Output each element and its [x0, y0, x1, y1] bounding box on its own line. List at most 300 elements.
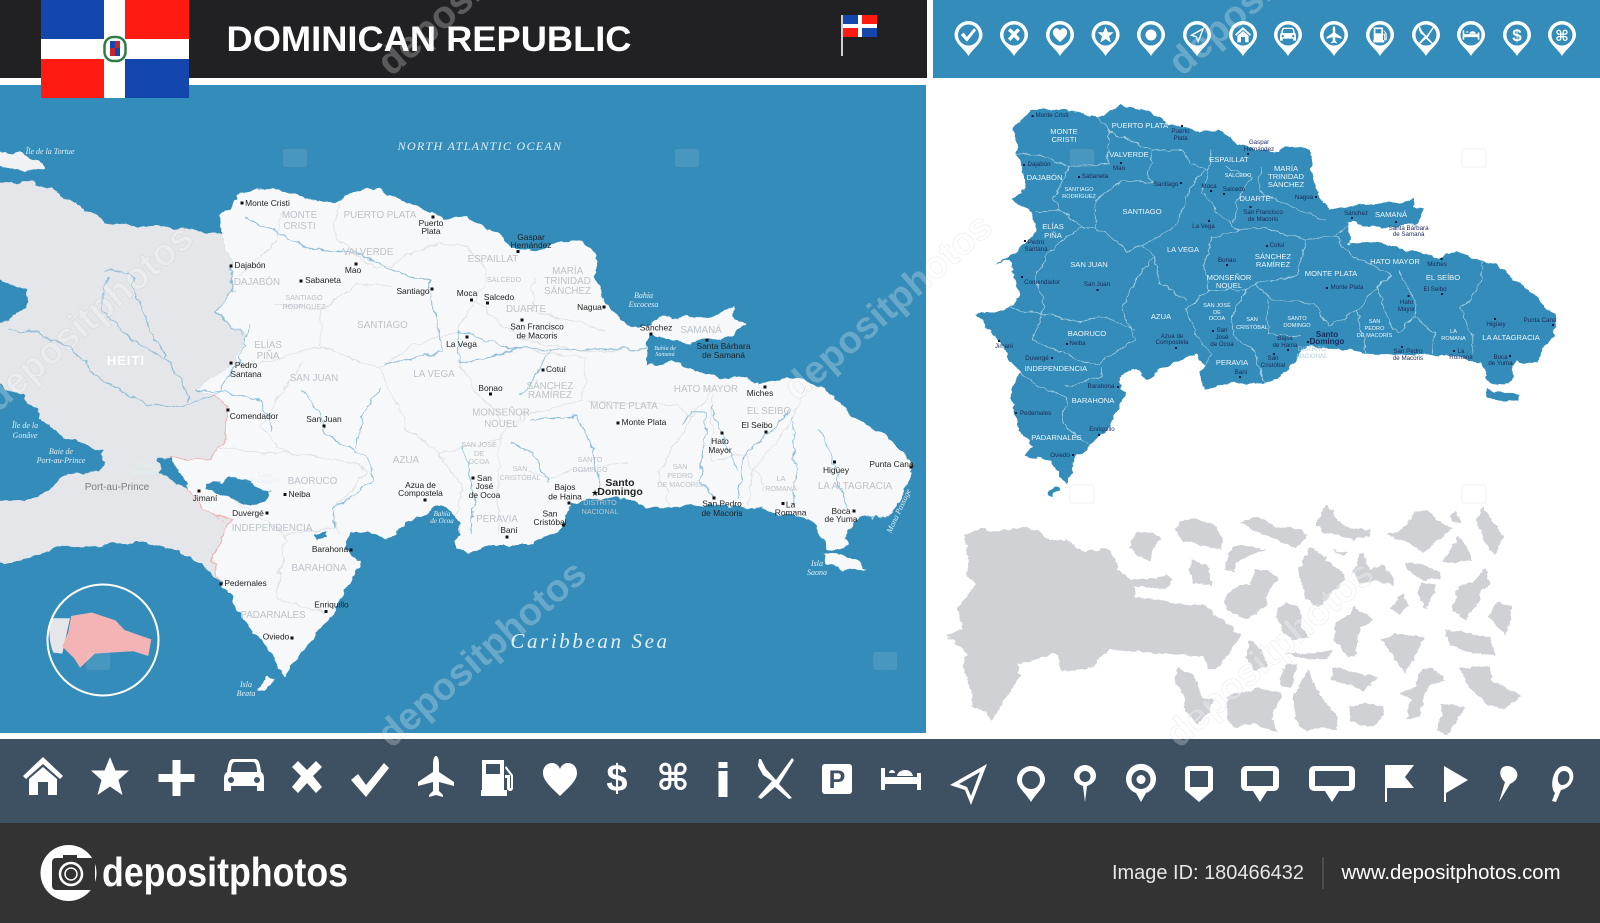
city labels: Bajos [1277, 335, 1293, 342]
city labels: de Samaná [702, 350, 745, 360]
international border [168, 394, 230, 583]
city labels: Nagua [577, 302, 602, 312]
province labels: SAMANÁ [1375, 210, 1408, 219]
province labels: SALCEDO [1225, 173, 1252, 179]
water labels: Port-au-Prince [36, 456, 86, 465]
province labels [1025, 121, 1541, 442]
city labels: José [1215, 334, 1229, 341]
city labels: San [477, 473, 492, 483]
city labels: de Macoris [517, 330, 557, 340]
province labels: MONTE PLATA [590, 401, 658, 412]
icon: pin dollar: $ [1512, 26, 1522, 45]
province labels: DAJABÓN [234, 277, 280, 288]
province labels: NACIONAL [582, 507, 618, 516]
province labels: MONSEÑOR [472, 408, 530, 418]
water labels: Enriquillo [250, 477, 280, 485]
city labels: Monte Cristi [1035, 112, 1069, 119]
province labels: SÁNCHEZ [544, 286, 591, 297]
water labels: Mona Passage [884, 487, 913, 535]
city labels: Compostela [1155, 339, 1189, 346]
icon: home [23, 757, 63, 795]
water labels: Saona [807, 568, 827, 577]
city labels: Cotuí [546, 364, 567, 374]
province labels: HATO MAYOR [674, 384, 738, 395]
icon: pin command: ⌘ [1555, 27, 1569, 45]
province borders [1009, 118, 1483, 445]
city labels: Comendador [230, 411, 278, 421]
city labels: de Ocoa [469, 490, 501, 500]
city labels: Sabaneta [1082, 173, 1109, 180]
province labels: OCOA [1209, 316, 1225, 322]
icon: pin dollar [1503, 21, 1531, 56]
city labels: Santana [230, 369, 262, 379]
city labels: Baní [1235, 369, 1248, 376]
icon: navigation [950, 764, 987, 805]
city labels: Oviedo [263, 632, 290, 642]
city labels: Romana [1449, 354, 1473, 361]
province labels: RODRÍGUEZ [1062, 193, 1096, 200]
icon: square callout [1185, 766, 1213, 802]
icon: star [91, 757, 129, 795]
icon: flag [1385, 765, 1414, 802]
city labels: Compostela [398, 488, 443, 498]
province labels: MONTE PLATA [1305, 269, 1358, 278]
icon: pin command [1548, 21, 1576, 56]
city labels: Salcedo [484, 292, 514, 302]
icon: plus [158, 760, 194, 796]
city labels: Punta Cana [869, 459, 914, 469]
province labels: SAN JOSÉ [461, 440, 497, 449]
icon: command: ⌘ [656, 758, 690, 799]
province labels: NOUEL [484, 419, 518, 430]
province labels: SAN JOSÉ [1203, 302, 1231, 309]
province labels: DOMINGO [1283, 323, 1311, 329]
icon: pin car [1274, 21, 1302, 56]
province labels: DE [1213, 310, 1221, 316]
city labels: Puerto [1171, 128, 1190, 135]
flag: small pin [841, 15, 877, 56]
city labels: Barahona [1088, 383, 1115, 390]
city labels: Comendador [1024, 279, 1060, 286]
city labels: Plata [421, 226, 441, 236]
province labels: DE [474, 449, 484, 458]
watermarks: depositphotos [775, 205, 1001, 409]
province labels: LA [1450, 329, 1457, 335]
city labels: Monte Plata [622, 417, 667, 427]
province labels: MARÍA [552, 266, 584, 277]
panel: main map [0, 85, 926, 733]
province labels: SALCEDO [487, 275, 522, 284]
city labels: Moca [457, 288, 478, 298]
province labels: SÁNCHEZ [1255, 252, 1291, 261]
logo: camera mark [40, 845, 96, 901]
province labels: CRISTÓBAL [500, 473, 540, 482]
icon: heart [543, 763, 577, 796]
panel: gray country and province silhouettes [946, 505, 1522, 735]
city labels: Plata [1173, 135, 1188, 142]
city labels: Miches [747, 388, 773, 398]
water labels: de Ocoa [430, 517, 454, 525]
water labels: Beata [237, 689, 255, 698]
city labels: Bonao [478, 383, 503, 393]
province labels: LA VEGA [413, 369, 455, 380]
province labels: PERAVIA [476, 514, 518, 525]
city labels: El Seibo [1423, 286, 1447, 293]
city labels: Sabaneta [305, 275, 341, 285]
city labels: Higüey [823, 465, 850, 475]
province labels: VALVERDE [343, 247, 394, 258]
province borders [219, 203, 807, 613]
city labels: Boca [831, 506, 851, 516]
city labels: Baní [500, 525, 518, 535]
city labels: Barahona [312, 544, 348, 554]
province labels: DE MACORÍS [1357, 332, 1392, 339]
city labels: Mayor [708, 445, 732, 455]
flag: large [41, 0, 189, 98]
city labels: Salcedo [1223, 186, 1246, 193]
city labels: Monte Cristi [245, 198, 290, 208]
city labels: Azua de [405, 480, 436, 490]
capital marker: Santo Domingo: ★ [591, 488, 599, 498]
city labels: San [543, 508, 558, 518]
province labels: SAN [673, 462, 687, 471]
city labels: Gaspar [517, 232, 545, 242]
city labels: San Francisco [1243, 209, 1283, 216]
province labels: SANTIAGO [1122, 207, 1162, 216]
province labels: RAMÍREZ [1256, 260, 1290, 269]
province labels: TRINIDAD [544, 276, 591, 287]
landmass [0, 151, 913, 691]
city labels: Oviedo [1050, 452, 1070, 459]
province labels: CRISTÓBAL [1236, 324, 1268, 331]
city labels: Santiago [396, 286, 430, 296]
city labels: de Macoris [1393, 355, 1423, 362]
province silhouettes [1130, 505, 1522, 735]
city labels: Bajos [555, 482, 575, 492]
province labels: SÁNCHEZ [527, 381, 573, 392]
city labels: La [1458, 348, 1465, 355]
icon: magnifier [1552, 766, 1573, 802]
city labels: de Yuma [1488, 360, 1513, 367]
website url: www.depositphotos.com [1340, 862, 1560, 884]
water labels: Samaná [655, 352, 675, 358]
icon: bed [881, 768, 921, 790]
water labels: Lago [257, 471, 273, 479]
logo: wordmark: depositphotos [102, 849, 348, 895]
city labels: Pedro [235, 360, 258, 370]
city labels: Domingo [597, 486, 643, 498]
city labels: de Ocoa [1210, 341, 1234, 348]
city labels: Bonao [1218, 257, 1236, 264]
city labels: Santa Bárbara [1389, 225, 1429, 232]
icon: map pin [1017, 766, 1045, 802]
province labels: SANTO [578, 455, 603, 464]
province labels: PADARNALES [240, 610, 306, 621]
province labels: DE MACORÍS [657, 480, 703, 489]
city labels [995, 112, 1557, 459]
city labels: Pedro [1028, 239, 1045, 246]
city labels: San Juan [1084, 281, 1111, 288]
city labels: Mao [345, 265, 361, 275]
province labels: ESPAILLAT [468, 254, 518, 265]
icon: pin cross [1000, 21, 1028, 56]
icon: pin bed [1457, 21, 1485, 56]
icon: cross [292, 761, 322, 793]
city labels: Punta Cana [1524, 317, 1557, 324]
city labels: DISTRITO [1298, 347, 1326, 353]
water labels: Bahía [634, 291, 653, 300]
icon: plane [418, 756, 454, 797]
province labels: MONSEÑOR [1207, 273, 1252, 282]
city labels: Hato [1400, 299, 1414, 306]
province labels: ESPAILLAT [1209, 155, 1249, 164]
province labels: ROMANA [765, 484, 797, 493]
province labels: ELÍAS [1042, 222, 1064, 231]
province labels: PIÑA [257, 351, 280, 362]
city labels: La [786, 500, 796, 510]
city labels: Enriquillo [1089, 426, 1115, 433]
province labels: PIÑA [1044, 231, 1063, 240]
panel: province map [977, 105, 1557, 497]
city labels: San [1216, 327, 1228, 334]
city labels: Santa Bárbara [696, 341, 751, 351]
water labels: Bahía de [654, 346, 676, 352]
label: Heiti: HEITI [107, 353, 145, 368]
province labels: CRISTI [283, 221, 316, 232]
province labels: NOUEL [1216, 281, 1242, 290]
city labels: San [1267, 355, 1279, 362]
province labels: CRISTI [1052, 135, 1076, 144]
city labels: Cristóbal [1261, 362, 1285, 369]
province labels: BARAHONA [292, 563, 347, 574]
icon: dollar: $ [606, 758, 628, 800]
province labels [232, 210, 893, 621]
province labels: AZUA [393, 455, 420, 466]
city labels: Duvergé [1025, 355, 1049, 362]
province labels: DOMINGO [572, 465, 608, 474]
province labels: PUERTO PLATA [344, 210, 417, 221]
province labels: BARAHONA [1072, 396, 1115, 405]
city markers [198, 202, 912, 640]
province labels: SANTIAGO [357, 320, 408, 331]
province labels: MARÍA [1274, 164, 1299, 173]
city labels: Azua de [1161, 333, 1184, 340]
city labels: Romana [775, 508, 807, 518]
province labels: SAN [1246, 317, 1258, 323]
city labels: de Haina [548, 492, 582, 502]
city labels: Mao [1113, 165, 1126, 172]
city labels: Sánchez [1344, 210, 1368, 217]
province labels: LA [777, 474, 786, 483]
province labels: EL SEIBO [747, 406, 792, 417]
title: DOMINICAN REPUBLIC [226, 20, 632, 59]
icon: pin check [954, 21, 982, 56]
province labels: DISTRITO [583, 498, 617, 507]
province labels: SAMANÁ [680, 325, 722, 336]
province labels: DUARTE [1239, 194, 1271, 203]
city labels: Hato [711, 436, 729, 446]
province labels: EL SEÍBO [1426, 273, 1460, 282]
province labels: BAORUCO [1068, 329, 1106, 338]
province labels: SAN [513, 464, 527, 473]
city labels: Cristóbal [533, 517, 567, 527]
province labels: SANTIAGO [1065, 187, 1094, 193]
city labels: Pedernales [1020, 410, 1051, 417]
watermarks: depositphotos [1157, 552, 1383, 756]
water labels: Baie de [49, 447, 74, 456]
city labels: Neiba [289, 489, 311, 499]
city labels: de Yuma [825, 514, 858, 524]
icon: restaurant [758, 758, 794, 799]
icon: check [351, 763, 389, 797]
icons row [23, 756, 1573, 805]
city labels: Duvergé [232, 508, 264, 518]
province labels: SANTO [1287, 316, 1307, 322]
city labels: Cotuí [1270, 242, 1285, 249]
province labels: PUERTO PLATA [1112, 121, 1169, 130]
province labels: LA ALTAGRACIA [818, 481, 893, 492]
province labels: PEDRO [1365, 326, 1385, 332]
city markers [998, 115, 1554, 456]
icon: pin restaurant [1412, 21, 1440, 56]
province labels: HATO MAYOR [1370, 257, 1420, 266]
image id: Image ID: 180466432 [1112, 862, 1304, 884]
icon: target pin [1126, 764, 1156, 802]
water labels: Isla [810, 559, 823, 568]
city labels: Monte Plata [1330, 284, 1364, 291]
city labels: Jimaní [995, 343, 1013, 350]
country silhouette [946, 527, 1240, 720]
province labels: VALVERDE [1109, 150, 1149, 159]
city labels: San Juan [306, 414, 342, 424]
water labels: Étang [135, 461, 153, 469]
city labels: Puerto [419, 218, 444, 228]
city labels: Sánchez [640, 322, 672, 332]
header bar [0, 0, 927, 78]
city labels: Nagua [1295, 194, 1314, 201]
province labels: ELÍAS [254, 340, 282, 351]
province labels: AZUA [1151, 312, 1172, 321]
watermark cameras [86, 149, 1486, 670]
icon: pin home [1229, 21, 1257, 56]
province labels: TRINIDAD [1268, 172, 1304, 181]
city labels: Enriquillo [314, 600, 349, 610]
label: Port-au-Prince: Port-au-Prince [85, 482, 150, 493]
province labels: PERAVIA [1216, 358, 1249, 367]
city labels: Higüey [1486, 321, 1507, 328]
city labels: de Samaná [1393, 231, 1425, 238]
footer divider [1322, 857, 1324, 889]
icon: info [718, 762, 728, 797]
city labels: San Pedro [1393, 348, 1423, 355]
water labels: Île de la Tortue [25, 146, 75, 156]
city labels: San Pedro [702, 498, 742, 508]
city labels [193, 198, 914, 642]
icon: pin star [1092, 21, 1120, 56]
icon: fuel [481, 760, 513, 796]
province labels: DUARTE [506, 304, 547, 315]
watermarks: depositphotos [369, 552, 595, 756]
province labels: SAN JUAN [1070, 260, 1108, 269]
inset locator map [49, 613, 151, 668]
province labels: SAN [1369, 319, 1380, 325]
city labels: Hernández [511, 240, 551, 250]
water labels: Gonâve [13, 431, 38, 440]
city labels: San Francisco [510, 322, 564, 332]
icon: parking: P [829, 766, 845, 794]
province labels: PADARNALES [1031, 433, 1082, 442]
province labels: MONTE [282, 210, 318, 221]
icon: round pin [1074, 765, 1096, 802]
city labels: Santiago [1154, 181, 1179, 188]
blue country shape [977, 105, 1556, 497]
province labels: LA ALTAGRACIA [1482, 333, 1541, 342]
province labels: SAN JUAN [290, 373, 338, 384]
icon: callout [1241, 766, 1279, 802]
province labels: DAJABÓN [1027, 173, 1062, 182]
icon: pin heart [1046, 21, 1074, 56]
city labels: Dajabón [1027, 161, 1051, 168]
water labels: NORTH ATLANTIC OCEAN [397, 139, 562, 153]
rivers [9, 219, 848, 533]
water labels: Île de la [11, 420, 38, 430]
city labels: Miches [1427, 261, 1447, 268]
water labels: Escocesa [628, 300, 658, 309]
city labels: Gaspar [1249, 139, 1269, 146]
city labels: Pedernales [224, 578, 267, 588]
province labels: RODRÍGUEZ [282, 302, 326, 311]
province labels: PEDRO [667, 471, 693, 480]
city labels: Santana [1024, 246, 1048, 253]
water labels: Isla [239, 680, 252, 689]
city labels: Boca [1493, 354, 1508, 361]
icon: car [224, 759, 264, 791]
icon: pin navigation [1183, 21, 1211, 56]
city labels: Santo [605, 477, 635, 489]
city labels: Santo [1316, 330, 1338, 339]
city labels: Domingo [1310, 337, 1344, 346]
water labels: Caribbean Sea [510, 629, 670, 653]
city labels: El Seibo [741, 420, 773, 430]
city labels: Mayor [1398, 306, 1415, 313]
city labels: de Macoris [702, 508, 742, 518]
city labels: Jimaní [193, 493, 218, 503]
province labels: LA VEGA [1167, 245, 1200, 254]
city labels: de Haina [1273, 342, 1298, 349]
watermarks [0, 0, 1386, 756]
province labels: OCOA [468, 457, 490, 466]
icon: pushpin [1499, 766, 1517, 802]
province labels: BAORUCO [288, 476, 338, 487]
water labels: Saumâtre [131, 468, 157, 476]
inset circle [48, 584, 158, 696]
icon: pennant [1444, 766, 1468, 802]
water labels: Bahía [434, 510, 451, 518]
province labels: SANTIAGO [285, 293, 323, 302]
city labels: José [476, 481, 494, 491]
province labels: SÁNCHEZ [1268, 180, 1304, 189]
city labels: NACIONAL [1297, 354, 1328, 360]
province labels: ROMANA [1441, 336, 1466, 342]
city labels: Neiba [1069, 340, 1086, 347]
province labels: RAMÍREZ [528, 390, 572, 401]
icon: pin fuel [1366, 21, 1394, 56]
panel: icon bar [0, 739, 1600, 823]
city labels: Dajabón [234, 260, 266, 270]
icon: pin dot [1137, 21, 1165, 56]
city labels: La Vega [1192, 223, 1215, 230]
city labels: Moca [1201, 183, 1217, 190]
